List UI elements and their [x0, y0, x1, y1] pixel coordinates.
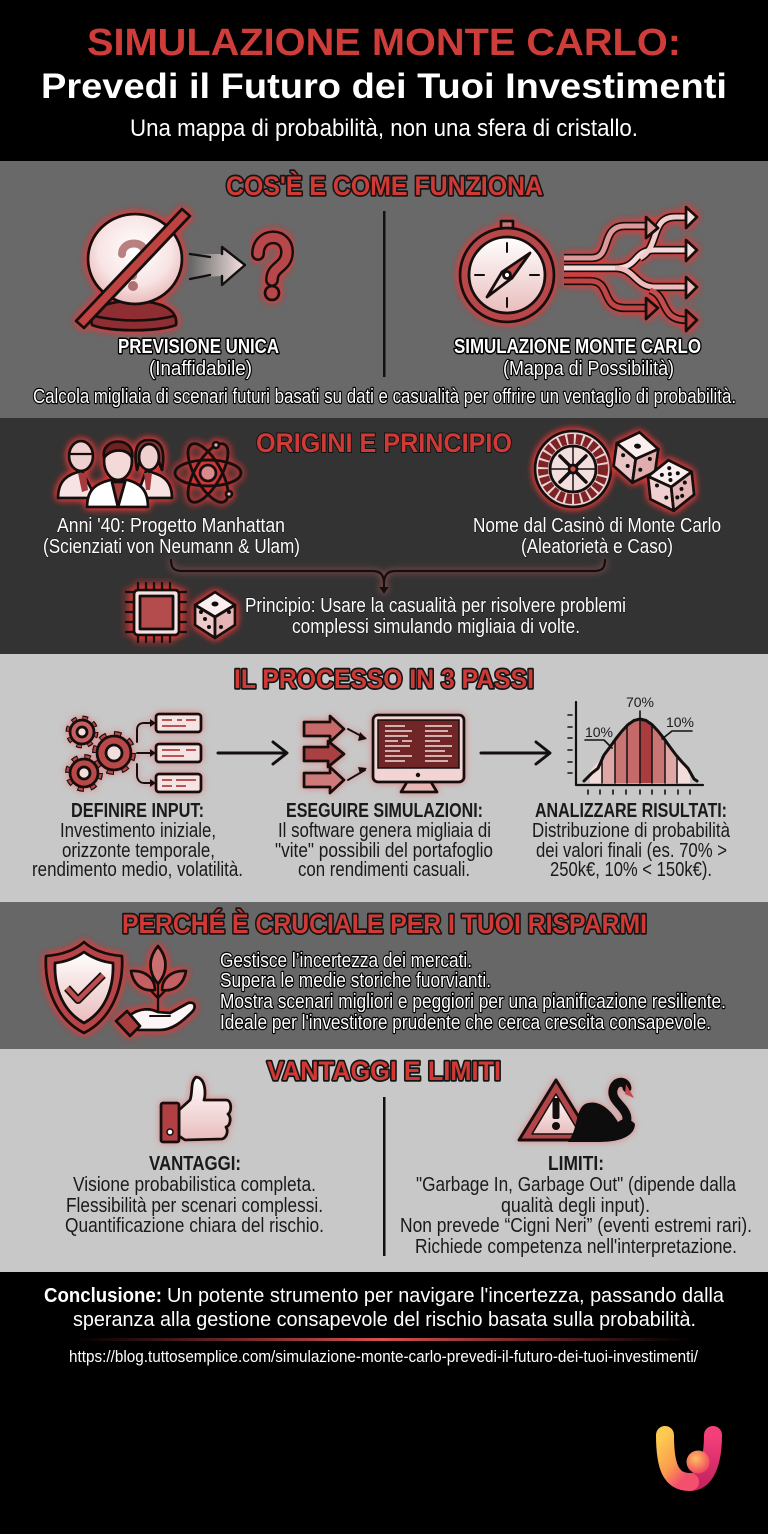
label: casino: (Aleatorietà e Caso) [521, 536, 673, 558]
step 2 text: ESEGUIRE SIMULAZIONI: [286, 800, 483, 822]
label: simulazione monte carlo: SIMULAZIONE MONTE CARLO [454, 336, 701, 358]
arrow: step 1 to 2 [218, 742, 287, 764]
limiti text: qualità degli input). [501, 1195, 650, 1217]
chart: bell curve distribution: 70% [626, 694, 654, 710]
icon: question mark [258, 237, 287, 300]
step 1 text: orizzonte temporale, [62, 840, 215, 862]
chart: bell curve distribution: 10% [585, 724, 613, 740]
label: simulazione monte carlo: (Mappa di Possibilità) [503, 358, 674, 380]
connector brace [171, 560, 605, 594]
vantaggi text: Flessibilità per scenari complessi. [66, 1195, 323, 1217]
icon: simulation monitor [304, 715, 464, 793]
icon: gears and input cards [69, 714, 201, 792]
panel: perché è cruciale [46, 908, 726, 1036]
label: casino: Nome dal Casinò di Monte Carlo [473, 515, 721, 537]
conclusion: speranza alla gestione consapevole del rischio basata sulla probabilità. [73, 1308, 696, 1331]
icon: scientists [58, 440, 172, 507]
vantaggi text: Quantificazione chiara del rischio. [65, 1215, 324, 1237]
principle text: complessi simulando migliaia di volte. [292, 616, 580, 638]
icon: thumbs up [161, 1077, 231, 1142]
label: previsione unica [118, 336, 279, 380]
icon: fading arrow [190, 247, 245, 285]
heading: ORIGINI E PRINCIPIO [256, 428, 512, 458]
heading: VANTAGGI E LIMITI [267, 1056, 501, 1086]
step 3 text [532, 800, 731, 881]
title line 1: SIMULAZIONE MONTE CARLO: [87, 22, 681, 64]
step 2 text: Il software genera migliaia di [278, 820, 491, 842]
icon: crossed crystal ball [76, 209, 190, 330]
step 3 text: Distribuzione di probabilità [532, 820, 731, 842]
label: manhattan: (Scienziati von Neumann & Ulam) [43, 536, 300, 558]
step 1 text: Investimento iniziale, [60, 820, 216, 842]
step 2 text: con rendimenti casuali. [298, 859, 470, 881]
heading: IL PROCESSO IN 3 PASSI [234, 664, 534, 694]
benefits list: Supera le medie storiche fuorvianti. [220, 970, 491, 992]
subtitle: Una mappa di probabilità, non una sfera di cristallo. [130, 115, 638, 142]
icon: chip [126, 583, 186, 642]
heading: COS'È E COME FUNZIONA [226, 170, 543, 201]
step 1 text [32, 800, 243, 881]
icon: dice pair [612, 429, 696, 513]
conclusion: Conclusione: [44, 1284, 162, 1307]
header [41, 22, 727, 142]
heading: PERCHÉ È CRUCIALE PER I TUOI RISPARMI [122, 908, 647, 939]
icon: roulette [535, 431, 611, 507]
chart: bell curve distribution [568, 694, 703, 794]
label: previsione unica: (Inaffidabile) [149, 358, 252, 380]
step 1 text: DEFINIRE INPUT: [71, 800, 204, 822]
vantaggi text: Visione probabilistica completa. [73, 1174, 316, 1196]
panel: cos'è e come funziona [33, 170, 736, 408]
source url: https://blog.tuttosemplice.com/simulazione-monte-carlo-prevedi-il-futuro-dei-tuoi-investimenti/ [69, 1348, 698, 1366]
step 3 text: dei valori finali (es. 70% > [536, 840, 727, 862]
step 2 text [275, 800, 493, 881]
benefits list [220, 950, 726, 1034]
icon: branching paths [564, 207, 697, 331]
step 1 text: rendimento medio, volatilità. [32, 859, 243, 881]
title line 2: Prevedi il Futuro dei Tuoi Investimenti [41, 67, 727, 106]
vantaggi text [65, 1153, 324, 1237]
icon: logo [665, 1435, 713, 1482]
conclusion [44, 1284, 725, 1331]
icon: compass [460, 221, 554, 322]
divider [383, 211, 386, 377]
limiti text: LIMITI: [548, 1153, 604, 1175]
limiti text [400, 1153, 752, 1258]
icon: plant in hand [116, 946, 195, 1036]
vantaggi text: VANTAGGI: [149, 1153, 241, 1175]
red rule [75, 1338, 690, 1341]
principle text: Principio: Usare la casualità per risolvere problemi [245, 595, 626, 617]
icon: atom [175, 438, 241, 508]
icon: warning and black swan [519, 1080, 635, 1142]
arrow: step 2 to 3 [481, 742, 550, 764]
divider [383, 1097, 386, 1256]
label: manhattan: Anni '40: Progetto Manhattan [57, 515, 285, 537]
icon: die [195, 592, 235, 638]
conclusion: Un potente strumento per navigare l'incertezza, passando dalla [167, 1284, 725, 1307]
panel: origini e principio [43, 428, 721, 642]
step 3 text: ANALIZZARE RISULTATI: [535, 800, 727, 822]
principle text [245, 595, 626, 638]
label: previsione unica: PREVISIONE UNICA [118, 336, 279, 358]
label: manhattan [43, 515, 300, 558]
panel: vantaggi e limiti [65, 1056, 752, 1258]
step 3 text: 250k€, 10% < 150k€). [550, 859, 712, 881]
chart: bell curve distribution: 10% [666, 714, 694, 730]
label: casino [473, 515, 721, 558]
panel: il processo in 3 passi [32, 664, 731, 881]
benefits list: Gestisce l’incertezza dei mercati. [220, 950, 472, 972]
icon: shield [46, 942, 122, 1033]
step 2 text: "vite" possibili del portafoglio [275, 840, 493, 862]
label: simulazione monte carlo [454, 336, 701, 380]
